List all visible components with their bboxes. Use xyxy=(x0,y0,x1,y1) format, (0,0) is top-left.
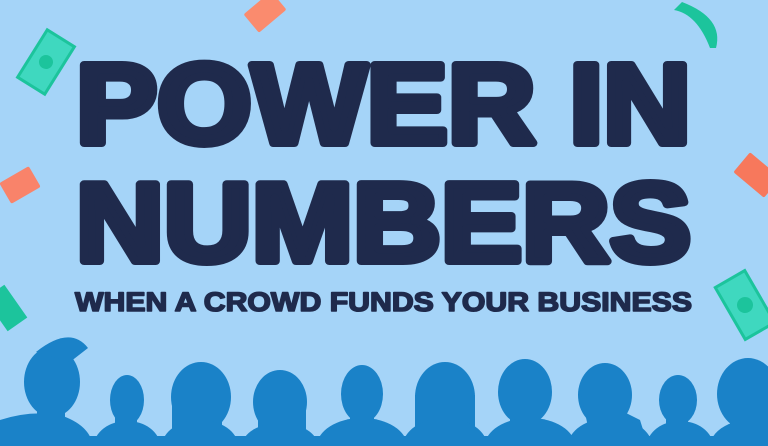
icon: green bill top right xyxy=(674,2,717,48)
icon: orange card left xyxy=(0,166,41,204)
crowd silhouettes xyxy=(0,337,768,446)
subtitle: WHEN A CROWD FUNDS YOUR BUSINESS xyxy=(75,287,692,317)
title: NUMBERS xyxy=(76,161,691,285)
icon: green bill top left xyxy=(18,30,74,94)
icon: green bill right xyxy=(715,271,768,339)
title xyxy=(76,41,691,285)
icon: green bill left edge xyxy=(0,285,27,331)
icon: orange card right xyxy=(733,152,768,198)
title: POWER IN xyxy=(76,41,691,167)
icon: orange card top xyxy=(243,0,287,33)
